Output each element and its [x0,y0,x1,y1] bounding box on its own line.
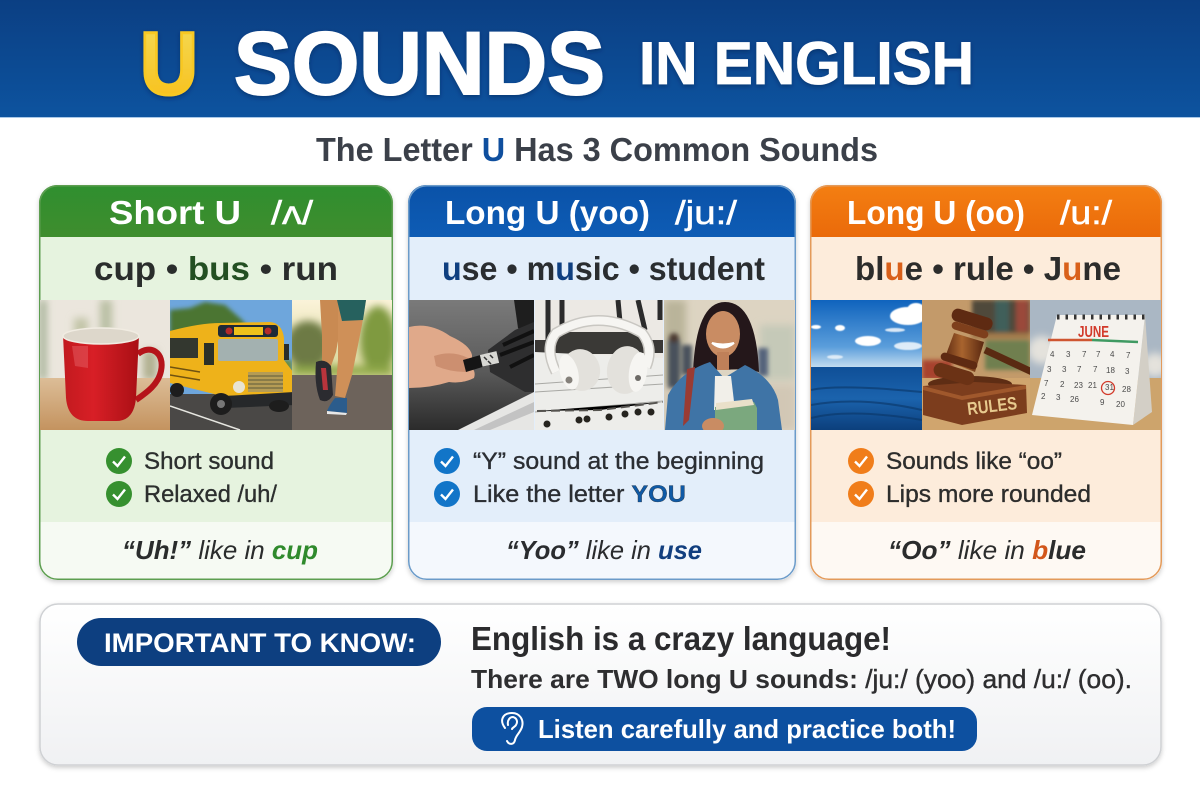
badge: important to know [77,618,441,666]
example words: blue rule June: blue • rule • June [855,250,1121,287]
card heading: long U yoo: Long U (yoo) [445,194,650,231]
tip: Yoo like in use: “Yoo” like in use [506,535,702,565]
checklist: long U yoo [434,448,764,508]
photo: June desk calendar: 26 [1070,395,1079,404]
photo: sea and sky [811,300,926,430]
checklist: long U oo: Sounds like “oo” [886,448,1062,475]
callout text: There are TWO long U sounds: /ju:/ (yoo) and /u:/ (oo). [471,664,1132,694]
photo: June desk calendar: 28 [1122,385,1131,394]
card heading: long U yoo: /ju:/ [675,194,738,231]
photo: June desk calendar: JUNE [1078,324,1109,341]
tip: Oo like in blue: “Oo” like in blue [888,535,1086,565]
title: U [140,13,198,113]
photo: June desk calendar: 23 [1074,381,1083,390]
photo: June desk calendar: 3 [1062,365,1067,374]
card heading: long U oo: /u:/ [1060,194,1113,231]
photo: smiling student [664,300,795,434]
card heading: long U oo: Long U (oo) [847,194,1025,231]
photo: June desk calendar: 3 [1066,350,1071,359]
photo: June desk calendar: 2 [1041,392,1046,401]
checklist: long U yoo: “Y” sound at the beginning [473,448,764,475]
title [140,13,974,113]
icon: check [848,481,874,507]
photo: USB and laptop [409,300,534,430]
card heading: long U oo [847,194,1113,231]
example words: use music student: use • music • student [442,250,765,287]
photo: June desk calendar: 2 [1060,380,1065,389]
panel: short U card [39,185,396,580]
photo: June desk calendar: 7 [1077,365,1082,374]
icon: check [434,481,460,507]
photo: June desk calendar: 21 [1088,381,1097,390]
photo: June desk calendar: 31 [1105,383,1114,392]
icon: check [106,481,132,507]
photo: runner [286,300,396,430]
photo: June desk calendar: 3 [1125,367,1130,376]
checklist: long U yoo: Like the letter YOU [473,481,686,508]
card heading: short U: Short U [109,194,241,231]
checklist: short U [106,448,277,508]
photo: June desk calendar: 4 [1110,350,1115,359]
photo: gavel and rules book [922,300,1032,430]
photo: June desk calendar: 18 [1106,366,1115,375]
title: IN ENGLISH [639,30,974,97]
badge: important to know: IMPORTANT TO KNOW: [104,628,416,658]
photo: June desk calendar: 9 [1100,398,1105,407]
photo: headphones on sheet music [535,300,663,430]
icon: ear [502,713,523,744]
panel: long U oo card [810,185,1167,580]
photo: gavel and rules book: RULES [966,393,1018,419]
photo: June desk calendar: 3 [1047,365,1052,374]
photo: school bus [170,300,295,430]
subtitle: The Letter U Has 3 Common Sounds [316,131,878,168]
photo: June desk calendar: 20 [1116,400,1125,409]
title: SOUNDS [234,13,605,113]
checklist: short U: Relaxed /uh/ [144,481,277,508]
checklist: long U oo [848,448,1091,508]
icon: check [106,448,132,474]
tip: Uh like in cup: “Uh!” like in cup [122,535,318,565]
header banner [0,0,1200,118]
card heading: short U: /ʌ/ [271,194,314,231]
card heading: long U yoo [445,194,738,231]
panel: long U yoo card [408,185,796,580]
photo: June desk calendar [1028,300,1167,430]
photo: June desk calendar: 7 [1096,350,1101,359]
photo: June desk calendar: 7 [1126,351,1131,360]
photo: June desk calendar: 7 [1082,350,1087,359]
photo: June desk calendar: 3 [1056,393,1061,402]
icon: check [848,448,874,474]
photo: June desk calendar: 4 [1050,350,1055,359]
callout heading: English is a crazy language! [471,620,891,657]
photo: June desk calendar: 7 [1093,365,1098,374]
photo: red mug [40,300,170,430]
panel: important to know [40,604,1161,765]
photo: June desk calendar: 7 [1044,379,1049,388]
icon: check [434,448,460,474]
button: listen carefully: Listen carefully and practice both! [538,714,956,744]
example words: cup bus run: cup • bus • run [94,250,338,287]
card heading: short U [109,194,314,231]
checklist: short U: Short sound [144,448,274,475]
checklist: long U oo: Lips more rounded [886,481,1091,508]
button: listen carefully [472,707,977,751]
